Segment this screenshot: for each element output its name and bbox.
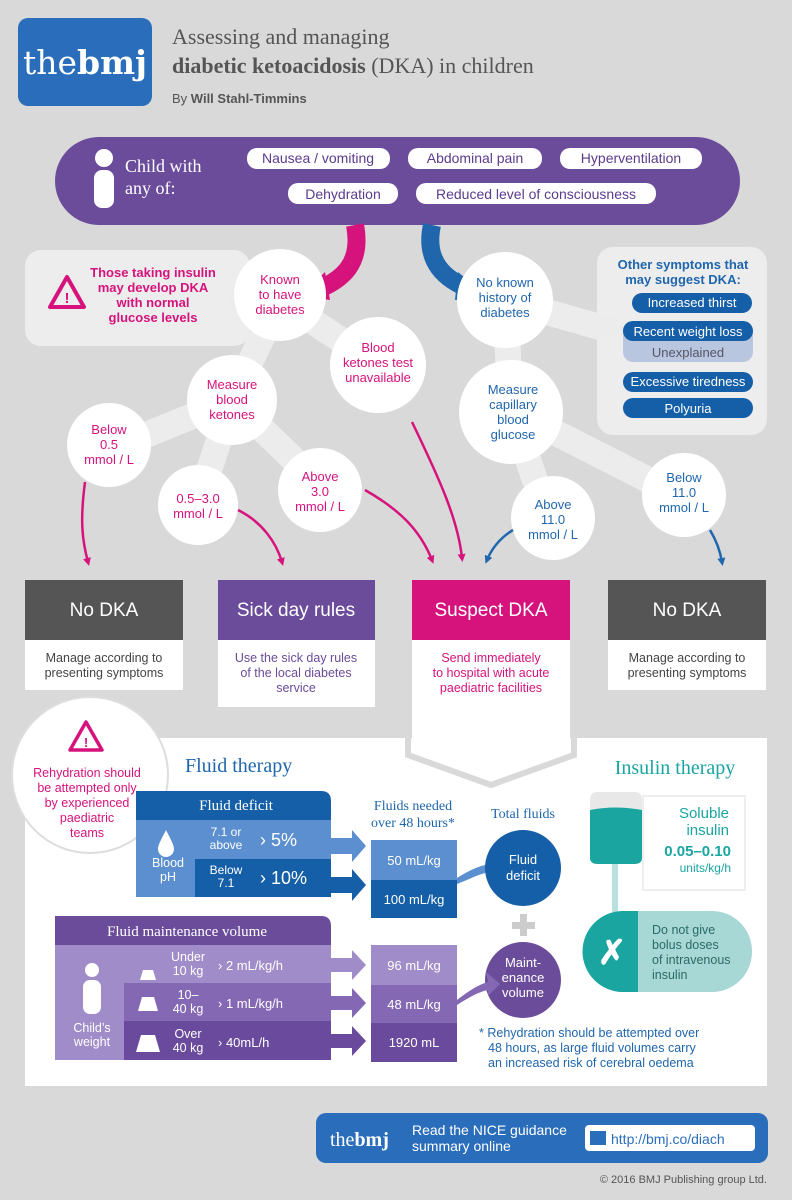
table: fluid deficit: › 5% <box>260 830 297 850</box>
table: maintenance: › 1 mL/kg/h <box>218 996 283 1011</box>
fluid needed boxes: 50 mL/kg <box>387 853 441 868</box>
callout: rehydration warning: ! <box>84 735 88 750</box>
panel: other symptoms <box>597 247 767 435</box>
table: maintenance: 40 kg <box>173 1002 203 1016</box>
table: fluid deficit: Fluid deficit <box>199 798 274 814</box>
panel: other symptoms: Recent weight loss <box>633 324 743 339</box>
box: suspect DKA <box>412 580 570 760</box>
box: suspect DKA: Send immediately <box>441 651 541 665</box>
callout: no bolus: ✗ <box>598 934 626 972</box>
fluid needed boxes <box>371 840 457 918</box>
table: maintenance: 40 kg <box>173 1041 203 1055</box>
box: no DKA left <box>25 580 183 690</box>
box: sick day rules: service <box>276 681 316 695</box>
circle texts: Above <box>302 469 338 484</box>
text: child with: any of: <box>125 178 175 198</box>
title: diabetic ketoacidosis (DKA) in children <box>172 53 534 78</box>
text: 11.0 <box>672 485 696 500</box>
circle: maintenance: enance <box>502 970 544 985</box>
symptom pills: Hyperventilation <box>581 150 681 166</box>
callout: rehydration warning: teams <box>70 826 104 840</box>
connector blobs <box>109 300 678 518</box>
icon: warning <box>50 277 84 307</box>
circle: fluid deficit: deficit <box>506 868 540 883</box>
table: maintenance: › 40mL/h <box>218 1035 269 1050</box>
callout: rehydration warning: by experienced <box>45 796 129 810</box>
circle: maintenance <box>485 942 561 1018</box>
logo <box>18 18 152 106</box>
table: fluid deficit: Blood <box>152 856 184 870</box>
circle texts: diabetes <box>255 302 305 317</box>
table: fluid deficit: pH <box>160 870 176 884</box>
circle texts: 3.0 <box>311 484 329 499</box>
text: child with: Child with <box>125 156 202 176</box>
table: fluid deficit: › 10% <box>260 868 307 888</box>
symptom pills <box>247 148 702 204</box>
arrow to fluid deficit circle <box>457 855 502 884</box>
circle texts: to have <box>259 287 301 302</box>
footer: NICE link: http://bmj.co/diach <box>611 1131 725 1147</box>
panel: insulin warning: may develop DKA <box>98 280 209 295</box>
text: diabetes <box>480 305 530 320</box>
circle texts: blood <box>216 392 248 407</box>
box: no DKA right: No DKA <box>653 600 722 621</box>
maintenance result boxes: 1920 mL <box>389 1035 439 1050</box>
callout: rehydration warning: paediatric <box>60 811 114 825</box>
table: fluid deficit: 7.1 or <box>211 825 241 839</box>
callout: no bolus <box>582 911 752 992</box>
text: capillary <box>489 397 537 412</box>
maintenance result boxes: 48 mL/kg <box>387 997 441 1012</box>
panel: other symptoms: Polyuria <box>665 401 712 416</box>
circle texts: mmol / L <box>84 452 134 467</box>
arrow to maintenance circle <box>457 972 500 1005</box>
decision circles <box>67 249 726 560</box>
icon: IV bag <box>590 792 745 912</box>
table: maintenance: Fluid maintenance volume <box>107 924 267 940</box>
box: suspect DKA: paediatric facilities <box>440 681 542 695</box>
footnote: 48 hours, as large fluid volumes carry <box>488 1041 696 1055</box>
title: Assessing and managing <box>172 24 390 49</box>
table: maintenance: Over <box>174 1027 202 1041</box>
panel: insulin warning <box>25 250 250 346</box>
text: blood <box>497 412 529 427</box>
text: soluble insulin: units/kg/h <box>680 861 731 875</box>
symptom pills: Nausea / vomiting <box>262 150 374 166</box>
circle texts: ketones test <box>343 355 413 370</box>
box: sick day rules: Sick day rules <box>237 600 355 621</box>
plus <box>512 914 535 936</box>
callout: rehydration warning: be attempted only <box>37 781 137 795</box>
text: 11.0 <box>541 512 565 527</box>
symptom pills: Abdominal pain <box>427 150 523 166</box>
panel: insulin warning: glucose levels <box>109 310 197 325</box>
footnote: * Rehydration should be attempted over <box>479 1026 699 1040</box>
text: No known <box>476 275 534 290</box>
table: maintenance: Under <box>171 950 205 964</box>
panel: other symptoms: Unexplained <box>652 345 724 360</box>
circle texts: Known <box>260 272 300 287</box>
icon: child <box>94 149 114 208</box>
circle texts: Blood <box>361 340 395 355</box>
callout: rehydration warning: Rehydration should <box>33 766 141 780</box>
box: sick day rules: of the local diabetes <box>240 666 352 680</box>
text: soluble insulin: 0.05–0.10 <box>664 843 731 860</box>
table: maintenance: 10 kg <box>173 964 203 978</box>
maintenance result boxes <box>371 945 457 1062</box>
circle texts: Measure <box>207 377 257 392</box>
title <box>172 24 534 78</box>
panel: other symptoms: Increased thirst <box>648 295 737 310</box>
icon: warning: ! <box>64 290 70 307</box>
text: total fluids: Total fluids <box>491 807 555 822</box>
panel: other symptoms: may suggest DKA: <box>625 272 741 287</box>
heading: fluid therapy: Fluid therapy <box>185 755 292 777</box>
circle texts: unavailable <box>345 370 411 385</box>
table: fluid deficit: Below <box>210 863 242 877</box>
callout: no bolus: bolus doses <box>652 938 719 952</box>
circle texts: mmol / L <box>173 506 223 521</box>
panel: other symptoms: Other symptoms that <box>618 257 748 272</box>
box: no DKA right: presenting symptoms <box>628 666 746 680</box>
box: no DKA right: Manage according to <box>629 651 745 665</box>
text: Measure <box>488 382 538 397</box>
callout: no bolus: insulin <box>652 968 687 982</box>
table: fluid deficit <box>136 791 331 897</box>
table: fluid deficit: above <box>210 838 243 852</box>
circle: maintenance: Maint- <box>505 955 541 970</box>
footer: NICE link: Read the NICE guidance <box>412 1122 567 1138</box>
text: history of <box>479 290 532 305</box>
table: maintenance: Child’s <box>73 1021 111 1035</box>
maintenance result boxes: 96 mL/kg <box>387 958 441 973</box>
box: no DKA right <box>608 580 766 690</box>
callout: rehydration warning <box>12 697 168 853</box>
panel: symptoms banner <box>55 137 740 225</box>
circle: fluid deficit: Fluid <box>509 852 537 867</box>
panel: other symptoms: Excessive tiredness <box>631 374 746 389</box>
text: mmol / L <box>528 527 578 542</box>
arrows: deficit <box>331 830 366 901</box>
footer: NICE link: summary online <box>412 1138 511 1154</box>
callout: no bolus: Do not give <box>652 923 715 937</box>
text: soluble insulin: insulin <box>686 822 729 839</box>
symptom pills: Reduced level of consciousness <box>436 186 636 202</box>
text: fluids needed: Fluids needed <box>374 799 452 814</box>
byline: By Will Stahl-Timmins <box>172 91 307 106</box>
fluid needed boxes: 100 mL/kg <box>384 892 444 907</box>
circle texts: ketones <box>209 407 255 422</box>
arrow: blue to no known history <box>430 225 472 290</box>
box: no DKA left: No DKA <box>70 600 139 621</box>
copyright: © 2016 BMJ Publishing group Ltd. <box>600 1174 767 1186</box>
arrows: maintenance <box>331 950 366 1056</box>
callout: no bolus: of intravenous <box>652 953 731 967</box>
panel: insulin warning: Those taking insulin <box>90 265 216 280</box>
box: no DKA left: Manage according to <box>46 651 162 665</box>
text: glucose <box>491 427 535 442</box>
footer: NICE link: thebmj <box>330 1129 389 1151</box>
panel: treatment <box>12 697 767 1086</box>
box: no DKA left: presenting symptoms <box>45 666 163 680</box>
box: sick day rules: Use the sick day rules <box>235 651 357 665</box>
circle texts <box>84 272 413 521</box>
box: suspect DKA: to hospital with acute <box>433 666 549 680</box>
panel: insulin warning: with normal <box>116 295 189 310</box>
flow arrows <box>82 422 722 562</box>
box: sick day rules <box>218 580 375 707</box>
text: mmol / L <box>659 500 709 515</box>
arrow: pink to known diabetes <box>312 225 357 292</box>
circle texts: Below <box>91 422 127 437</box>
footnote: an increased risk of cerebral oedema <box>488 1056 694 1070</box>
circle texts: 0.5–3.0 <box>176 491 220 506</box>
text: soluble insulin: Soluble <box>679 805 729 822</box>
symptom pills: Dehydration <box>305 186 381 202</box>
text: fluids needed: over 48 hours* <box>371 816 455 831</box>
circle texts: mmol / L <box>295 499 345 514</box>
circle: fluid deficit <box>485 830 561 906</box>
table: maintenance <box>55 916 331 1060</box>
circle: maintenance: volume <box>502 985 544 1000</box>
text: Above <box>535 497 571 512</box>
logo: thebmj <box>23 43 147 82</box>
circle texts: 0.5 <box>100 437 118 452</box>
footer: NICE link <box>316 1113 768 1163</box>
table: maintenance: weight <box>73 1035 111 1049</box>
table: fluid deficit: 7.1 <box>218 876 235 890</box>
table: maintenance: › 2 mL/kg/h <box>218 958 283 973</box>
box: suspect DKA: Suspect DKA <box>434 600 548 621</box>
text: Below <box>666 470 702 485</box>
table: maintenance: 10– <box>178 988 198 1002</box>
heading: insulin therapy: Insulin therapy <box>615 757 735 779</box>
